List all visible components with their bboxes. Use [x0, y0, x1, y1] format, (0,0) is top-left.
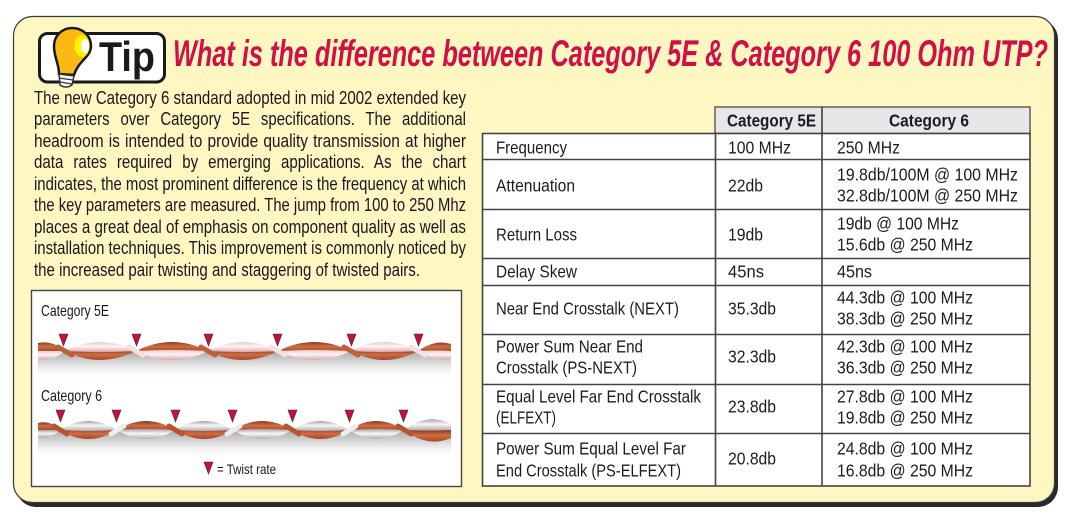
row: Attenuation: 32.8db/100M @ 250 MHz	[837, 186, 1018, 206]
row: Delay Skew: 45ns	[837, 262, 872, 282]
row: Delay Skew: Delay Skew	[496, 262, 577, 282]
row: Attenuation	[496, 165, 1018, 206]
table grid	[482, 133, 1030, 486]
row: Power Sum Near End Crosstalk: 36.3db @ 250 MHz	[837, 358, 973, 378]
row: Power Sum Near End Crosstalk: 32.3db	[728, 347, 776, 367]
legend: twist rate	[204, 461, 276, 477]
label: Category 5E: Category 5E	[41, 303, 109, 320]
row: Power Sum Near End Crosstalk: Crosstalk (PS-NEXT)	[496, 358, 637, 378]
row: Frequency: 100 MHz	[728, 138, 791, 158]
row: Return Loss: 19db	[728, 225, 763, 245]
row: Frequency: 250 MHz	[837, 138, 900, 158]
row: Return Loss: Return Loss	[496, 225, 577, 245]
text block: introduction paragraph	[34, 88, 466, 280]
row: Equal Level Far End Crosstalk: (ELFEXT)	[496, 408, 556, 428]
table header: Category 5E	[727, 110, 816, 130]
text block: introduction paragraph: headroom is intended to provide quality transmission at higher	[34, 131, 466, 151]
text block: introduction paragraph: places a great deal of emphasis on component quality as well as	[34, 217, 466, 237]
row: Power Sum Near End Crosstalk	[496, 337, 973, 378]
row: Attenuation: 22db	[728, 176, 763, 196]
label: Category 6: Category 6	[41, 388, 102, 405]
row: Delay Skew: 45ns	[728, 262, 764, 282]
row: Equal Level Far End Crosstalk: 19.8db @ 250 MHz	[837, 408, 973, 428]
table header	[715, 107, 1030, 134]
markers: Category 6 twist rate	[56, 410, 408, 422]
panel: twist rate illustration	[32, 290, 462, 486]
text block: introduction paragraph: installation techniques. This improvement is commonly noticed by	[34, 238, 466, 258]
row: Equal Level Far End Crosstalk: 27.8db @ 100 MHz	[837, 387, 973, 407]
row: Return Loss: 19db @ 100 MHz	[837, 214, 959, 234]
row: Power Sum Equal Level Far End Crosstalk: 20.8db	[728, 449, 776, 469]
table: specification comparison	[482, 107, 1030, 486]
row: Power Sum Equal Level Far End Crosstalk: 16.8db @ 250 MHz	[837, 461, 973, 481]
text block: introduction paragraph: indicates, the most prominent difference is the frequency at which	[34, 174, 466, 194]
row: Power Sum Equal Level Far End Crosstalk: End Crosstalk (PS-ELFEXT)	[496, 461, 681, 481]
row: Near End Crosstalk: Near End Crosstalk (NEXT)	[496, 299, 679, 319]
row: Near End Crosstalk	[496, 288, 973, 329]
legend: twist rate: = Twist rate	[217, 461, 276, 477]
text block: introduction paragraph: the increased pair twisting and staggering of twisted pairs.	[34, 260, 420, 280]
row: Delay Skew	[496, 262, 872, 282]
text block: introduction paragraph: data rates required by emerging applications. As the chart	[34, 152, 466, 172]
cable: Category 6 twisted pair	[38, 419, 451, 459]
text block: introduction paragraph: the key parameters are measured. The jump from 100 to 250 Mhz	[34, 195, 466, 215]
row: Power Sum Equal Level Far End Crosstalk	[496, 439, 973, 481]
cable: Category 5E twisted pair	[38, 342, 451, 380]
text block: introduction paragraph: The new Category 6 standard adopted in mid 2002 extended key	[34, 88, 466, 108]
row: Near End Crosstalk: 35.3db	[728, 299, 776, 319]
text block: introduction paragraph: parameters over Category 5E specifications. The additional	[34, 109, 466, 129]
row: Power Sum Near End Crosstalk: Power Sum Near End	[496, 337, 643, 357]
markers: Category 5E twist rate	[59, 334, 423, 346]
row: Near End Crosstalk: 38.3db @ 250 MHz	[837, 309, 973, 329]
row: Power Sum Equal Level Far End Crosstalk: Power Sum Equal Level Far	[496, 439, 686, 459]
row: Return Loss	[496, 214, 973, 255]
row: Frequency	[496, 138, 900, 158]
row: Attenuation: Attenuation	[496, 176, 575, 196]
row: Equal Level Far End Crosstalk: Equal Level Far End Crosstalk	[496, 387, 701, 407]
row: Equal Level Far End Crosstalk	[496, 387, 973, 428]
icon: tip badge with light bulb: Tip	[99, 33, 155, 80]
row: Frequency: Frequency	[496, 138, 567, 158]
row: Attenuation: 19.8db/100M @ 100 MHz	[837, 165, 1018, 185]
row: Power Sum Near End Crosstalk: 42.3db @ 100 MHz	[837, 337, 973, 357]
table header: Category 6	[889, 110, 969, 130]
row: Power Sum Equal Level Far End Crosstalk: 24.8db @ 100 MHz	[837, 439, 973, 459]
row: Return Loss: 15.6db @ 250 MHz	[837, 235, 973, 255]
row: Near End Crosstalk: 44.3db @ 100 MHz	[837, 288, 973, 308]
icon: tip badge with light bulb	[40, 28, 164, 87]
row: Equal Level Far End Crosstalk: 23.8db	[728, 397, 776, 417]
